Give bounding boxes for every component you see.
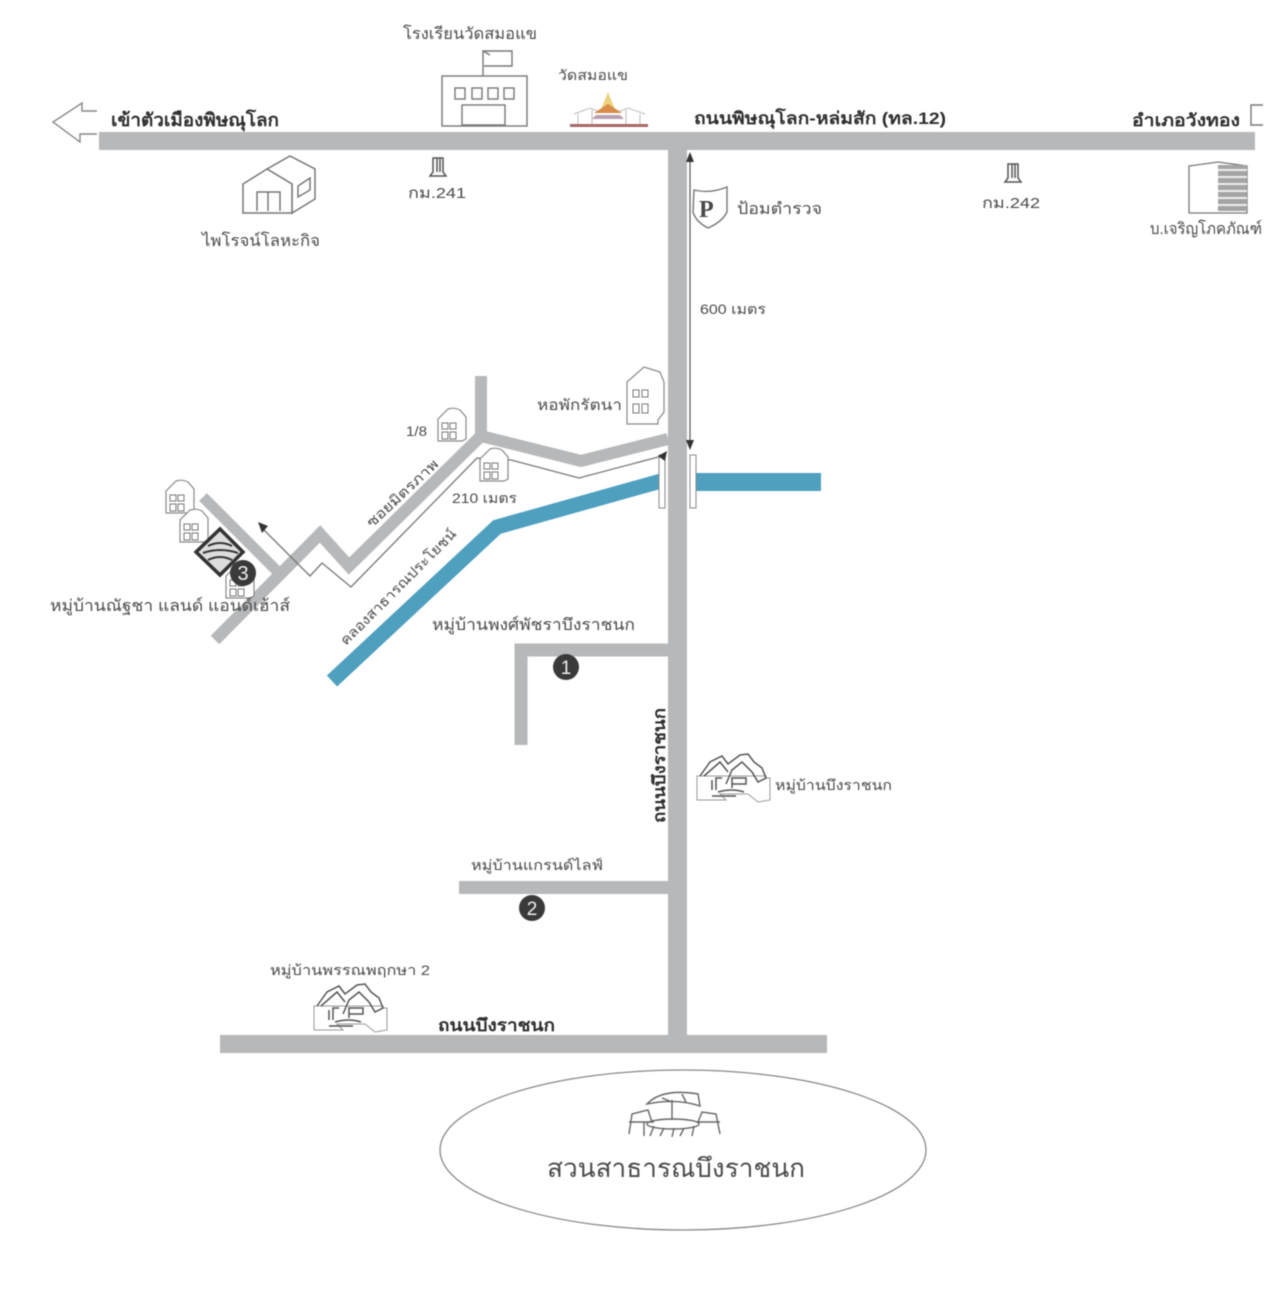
icon: temple [570,92,648,127]
label: km 241: กม.241 [408,185,466,202]
label: Bueng Ratchanok road: ถนนบึงราชนก [438,1016,555,1035]
icon: right arrow [1251,105,1263,125]
side road 1 [521,650,668,745]
label: Wang Thong: อำเภอวังทอง [1132,111,1240,130]
marker 1: 1 [561,658,571,679]
icon: police shield: P [699,197,714,223]
label: to Phitsanulok city: เข้าตัวเมืองพิษณุโลก [111,109,279,132]
label: temple: วัดสมอแข [558,67,628,83]
icon: house 1/8 [438,408,466,441]
label: police box: ป้อมตำรวจ [737,200,822,218]
icon: km 241 marker [430,158,446,176]
label: public canal: คลองสาธารณประโยชน์ [337,525,459,648]
label: Soi Mittraphap: ซอยมิตรภาพ [363,456,441,530]
label: Phongphatchara village: หมู่บ้านพงศ์พัชราบึงราชนก [432,615,635,635]
bottom road [220,1035,827,1053]
icon: parasol and tables [629,1092,720,1137]
marker 1 [553,654,579,680]
label: Phairot Lohakit: ไพโรจน์โลหะกิจ [200,231,320,250]
label: highway: ถนนพิษณุโลก-หล่มสัก (ทล.12) [694,108,946,129]
panel: Bueng Ratchanok park [440,1070,926,1230]
icon: Phanphruksa village [314,984,387,1032]
canal east [695,473,821,491]
bridge east [690,455,696,508]
arrow: route 210 metres [258,451,667,587]
bridge west [659,455,665,508]
icon: police shield [693,187,727,228]
label: Bueng Ratchanok village: หมู่บ้านบึงราชนก [775,777,892,794]
main vertical road [668,150,687,1036]
label: 1/8: 1/8 [406,423,427,439]
icon: left arrow [53,103,97,142]
marker 3 [230,560,256,586]
label: Phanphruksa 2 village: หมู่บ้านพรรณพฤกษา 2 [270,962,430,979]
marker 2 [519,895,545,921]
label: CP company: บ.เจริญโภคภัณฑ์ [1150,219,1262,238]
icon: site marker diamond [196,529,243,575]
top road [99,132,1255,150]
icon: Bueng Ratchanok village [697,754,770,802]
arrow: 600 metres [686,152,694,450]
icon: house by junction [480,448,508,481]
label: Rattana dorm: หอพักรัตนา [537,397,622,414]
label: park name: สวนสาธารณบึงราชนก [547,1153,805,1183]
label: school: โรงเรียนวัดสมอแข [403,24,537,43]
label: Natcha Land and House: หมู่บ้านณัฐชา แลนด์ แอนด์เฮ้าส์ [50,596,290,616]
marker 3: 3 [237,563,249,585]
icon: Rattana dorm [627,367,664,424]
branch road network [203,376,668,640]
label: km 242: กม.242 [982,195,1040,212]
icon: CP building [1189,162,1247,213]
canal west [332,481,661,681]
label: Grand Life village: หมู่บ้านแกรนด์ไลฟ์ [471,857,603,874]
icon: warehouse [243,156,315,213]
icon: house cluster [166,480,254,598]
label: 210 metres: 210 เมตร [452,490,518,506]
label: 600 metres: 600 เมตร [700,301,767,317]
side road 2 [459,881,668,894]
icon: school [442,51,527,126]
icon: km 242 marker [1005,164,1021,182]
label: Bueng Ratchanok road vertical: ถนนบึงราชนก [650,708,669,823]
marker 2: 2 [527,899,537,920]
